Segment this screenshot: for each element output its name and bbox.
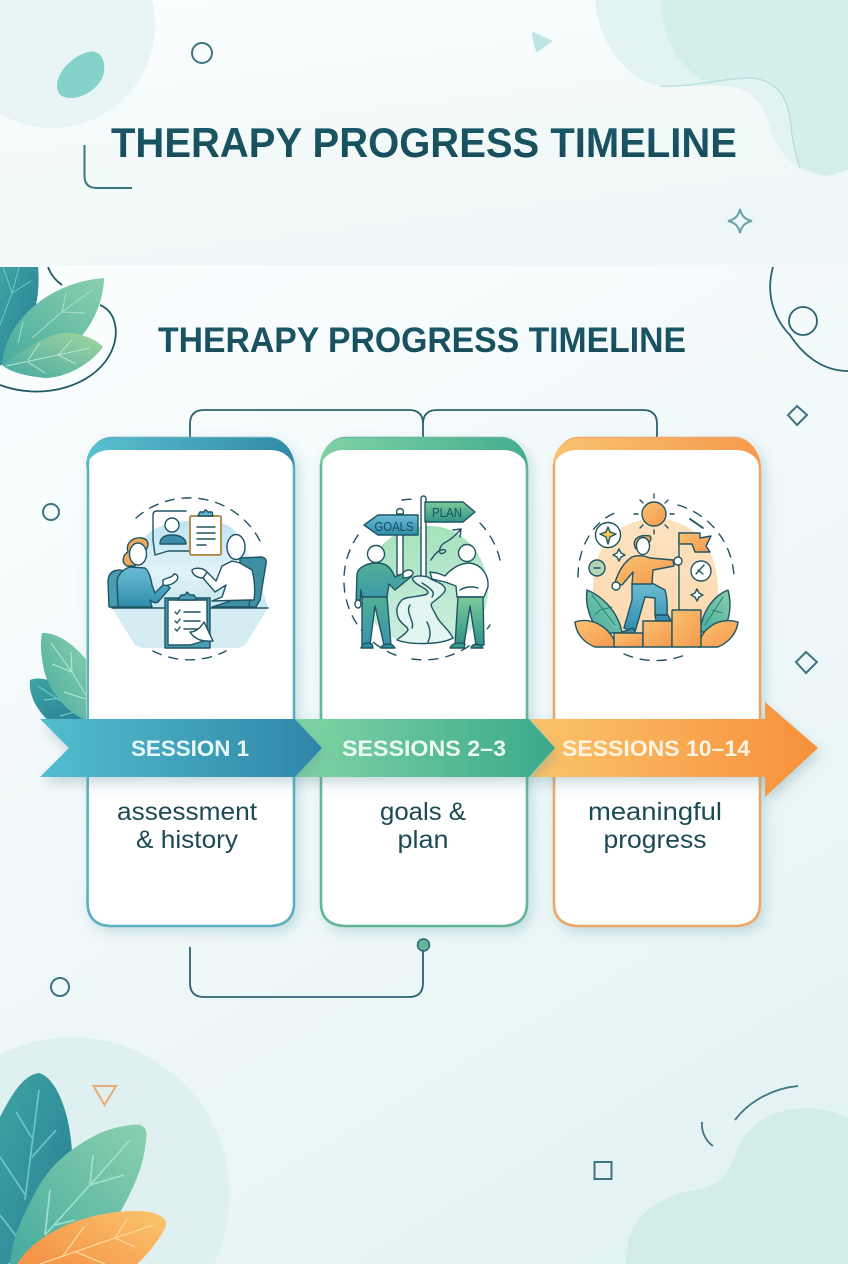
ribbon timeline — [40, 702, 818, 797]
card 2 label: goals & — [380, 798, 466, 826]
icon: assessment conversation — [108, 498, 268, 660]
icon: meaningful progress — [575, 494, 738, 661]
connector: bottom bracket — [190, 939, 430, 997]
card 3 header — [553, 438, 760, 466]
subtitle heading: THERAPY PROGRESS TIMELINE — [158, 321, 686, 360]
decoration: sparkle — [728, 209, 752, 233]
decoration: upper right diamond — [788, 406, 807, 425]
decoration: square — [594, 1162, 612, 1179]
decoration: top right blobs — [595, 0, 848, 176]
decoration: bottom right blob — [626, 1108, 848, 1264]
decoration: small ring top — [192, 43, 212, 63]
icon: goals and plan: PLAN — [432, 505, 462, 520]
panel: session 2 card — [320, 438, 527, 927]
decoration: diamond right — [796, 652, 817, 673]
decoration: bottom right arcs — [702, 1086, 798, 1146]
decoration: bottom left circle — [0, 1037, 230, 1264]
background: main panel — [0, 265, 848, 1264]
decoration: ring left — [43, 504, 59, 520]
ribbon: session 1: SESSION 1 — [131, 736, 249, 761]
panel: session 3 card — [553, 438, 760, 927]
main title: THERAPY PROGRESS TIMELINE — [111, 119, 737, 166]
decoration: top left circle with blob — [0, 0, 155, 128]
ribbon: sessions 10-14: SESSIONS 10–14 — [562, 736, 751, 761]
ribbon: sessions 2-3: SESSIONS 2–3 — [342, 736, 506, 761]
decoration: middle left leaves — [30, 633, 90, 722]
panel: session 1 card — [86, 438, 294, 927]
icon: goals and plan: GOALS — [374, 519, 414, 534]
decoration: upper right arcs and ring — [770, 267, 848, 371]
background: header band — [0, 0, 848, 265]
decoration: corner bracket — [84, 145, 132, 188]
decoration: orange triangle — [94, 1086, 116, 1105]
card 2 label: plan — [398, 826, 448, 854]
decoration: light triangle — [533, 33, 551, 51]
ribbon: sessions 2-3 — [295, 719, 555, 777]
decoration: bottom left leaves — [0, 1073, 166, 1264]
card 3 label: progress — [604, 826, 706, 854]
decoration: ring lower left — [51, 978, 69, 996]
card 3 label: meaningful — [588, 798, 722, 826]
ribbon: session 1 — [40, 719, 322, 777]
card 1 header — [86, 438, 294, 466]
icon: goals and plan — [344, 496, 500, 660]
card 1 label: assessment — [117, 798, 257, 826]
card 2 header — [320, 438, 527, 466]
decoration: upper left leaves — [0, 267, 116, 392]
ribbon: sessions 10-14 — [530, 702, 818, 797]
connector: top bracket — [190, 410, 657, 438]
card 1 label: & history — [136, 826, 239, 854]
